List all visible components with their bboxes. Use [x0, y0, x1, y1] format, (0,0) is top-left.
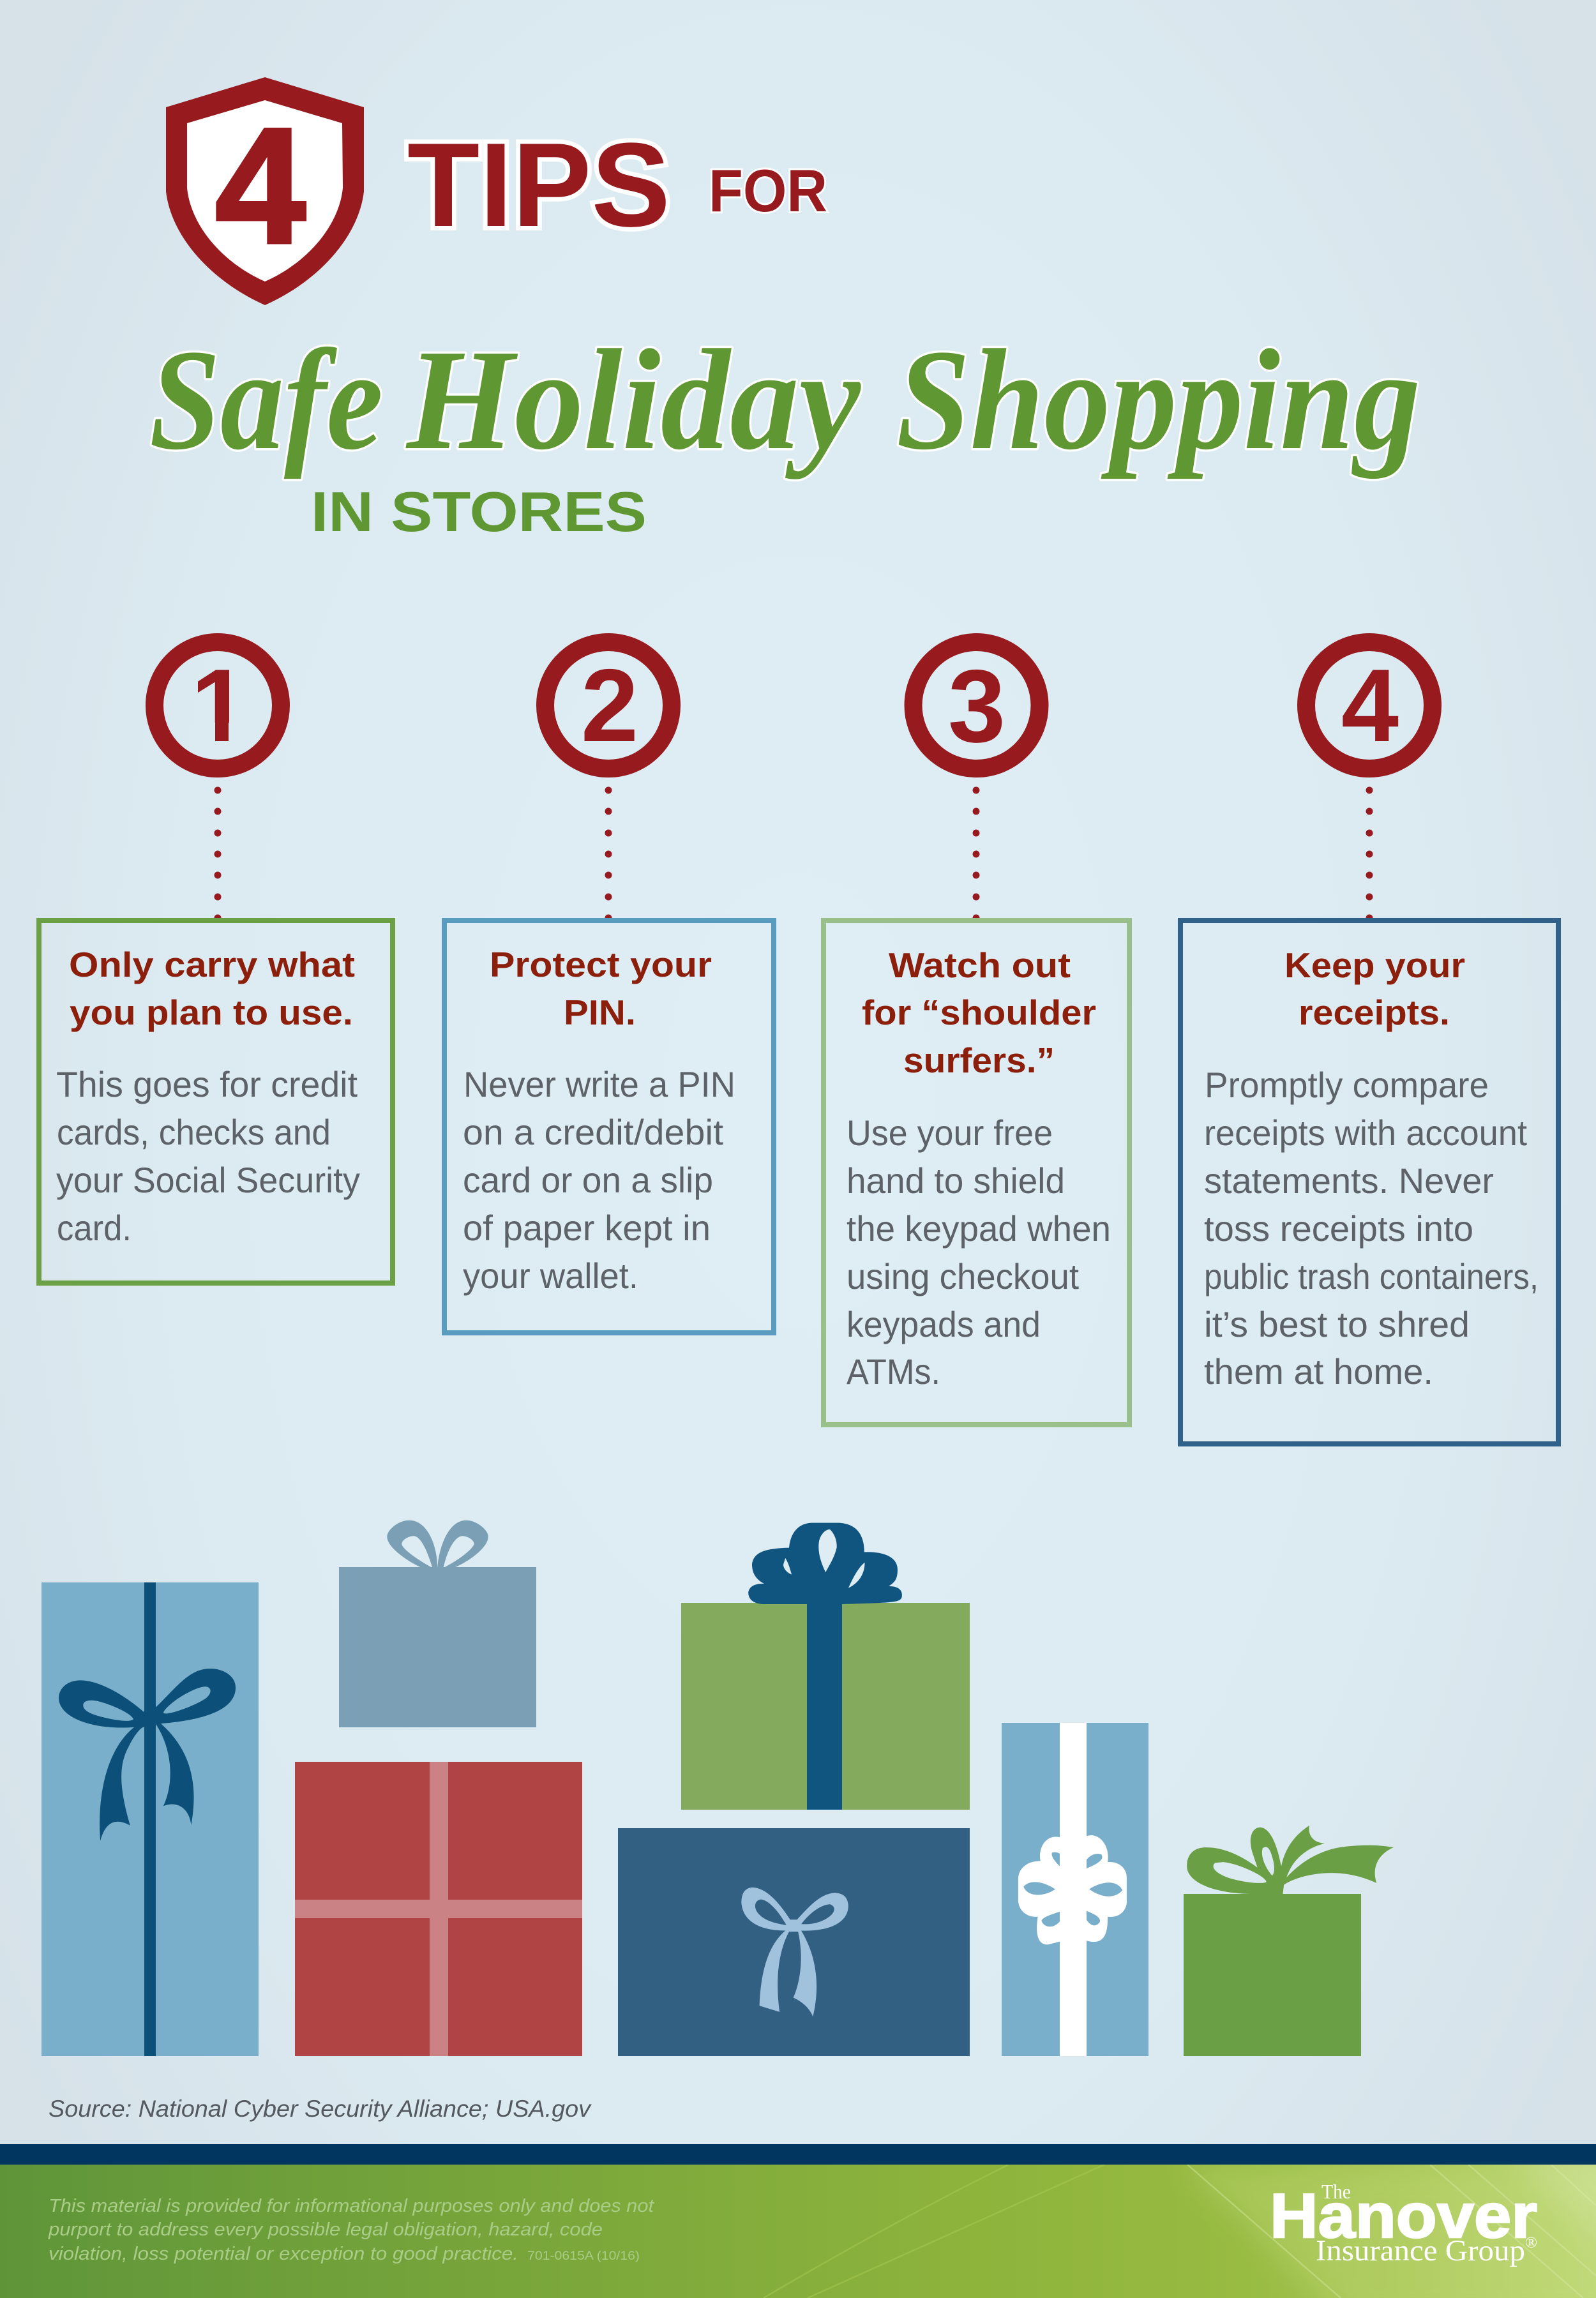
tip 1	[39, 642, 393, 1283]
tip 3 body: the keypad when	[847, 1208, 1111, 1249]
title: Safe Holiday Shopping: Holiday	[405, 320, 861, 479]
tip 4 body	[1204, 1065, 1539, 1392]
gift: green box with swept bow	[1184, 1826, 1394, 2056]
icon: green swept bow	[1187, 1826, 1394, 1894]
number badge 2	[545, 642, 672, 769]
tip 3 body: Use your free	[847, 1113, 1053, 1153]
gift: tall light blue box with navy bow	[41, 1582, 259, 2056]
logo: The Hanover Insurance Group: The	[1321, 2180, 1351, 2203]
dotted connector 1	[215, 786, 221, 922]
disclaimer: violation, loss potential or exception to good practice.	[49, 2244, 518, 2264]
tip 2 heading: PIN.	[564, 993, 636, 1032]
tip 1 heading	[69, 945, 355, 1032]
gift: navy box with pale bow	[618, 1828, 970, 2056]
tip 1 body	[56, 1064, 360, 1248]
tip 4 body: public trash containers,	[1204, 1256, 1539, 1296]
icon: grey-blue bow	[387, 1521, 488, 1568]
number badge 4: 4	[1341, 648, 1399, 763]
title: 4 tips for	[166, 77, 827, 305]
tip 2 body: your wallet.	[463, 1256, 638, 1296]
number badge 2: 2	[581, 648, 638, 763]
icon: navy layered bow	[748, 1523, 902, 1604]
heading: TIPS: TIPS	[407, 118, 670, 252]
tip 2 body: Never write a PIN	[463, 1064, 735, 1104]
gift: red box with cross ribbon	[295, 1762, 582, 2056]
footer band	[0, 2144, 1596, 2298]
tip 4 body: statements. Never	[1204, 1160, 1494, 1201]
tip 4 body: them at home.	[1204, 1351, 1433, 1392]
disclaimer	[48, 2196, 655, 2264]
tip 4 body: Promptly compare	[1205, 1065, 1489, 1105]
panel: tip 4 box	[1180, 920, 1558, 1444]
tip 3 body	[847, 1113, 1111, 1392]
tip 4 body: toss receipts into	[1204, 1208, 1473, 1249]
number badge 1	[154, 642, 281, 769]
number badge 3: 3	[948, 649, 1005, 764]
subtitle: in stores: IN STORES	[311, 480, 647, 543]
number badge 1: 1	[191, 648, 248, 763]
source note: Source: National Cyber Security Alliance; USA.gov	[49, 2096, 592, 2122]
tip 2 heading: Protect your	[490, 945, 712, 984]
icon: navy bow	[59, 1669, 236, 1841]
tip 1 body: cards, checks and	[57, 1112, 331, 1152]
tip 4	[1180, 642, 1558, 1444]
panel: tip 1 box	[39, 920, 393, 1283]
tip 3 body: ATMs.	[847, 1351, 940, 1392]
title: Safe Holiday Shopping: Safe	[149, 320, 383, 479]
title: Safe Holiday Shopping: Shopping	[896, 320, 1420, 479]
number badge 3	[913, 642, 1039, 769]
logo: The Hanover Insurance Group: Insurance Group	[1316, 2234, 1517, 2267]
logo: The Hanover Insurance Group: ®	[1525, 2235, 1537, 2251]
icon: shield with number 4	[166, 77, 364, 305]
tip 3 heading: Watch out	[889, 945, 1071, 985]
tip 4 heading: receipts.	[1299, 993, 1450, 1032]
tip 3 body: hand to shield	[847, 1160, 1065, 1201]
heading: FOR: FOR	[709, 157, 827, 224]
tip 1 body: your Social Security	[56, 1160, 360, 1200]
tip 3 heading: for “shoulder	[862, 993, 1096, 1032]
tip 1 body: This goes for credit	[56, 1064, 358, 1104]
tip 1 heading: Only carry what	[69, 945, 355, 984]
logo: The Hanover Insurance Group: Hanover	[1270, 2181, 1537, 2251]
disclaimer: purport to address every possible legal obligation, hazard, code	[48, 2219, 603, 2240]
title: Safe Holiday Shopping	[149, 320, 1420, 479]
tip 2 body: on a credit/debit	[463, 1112, 723, 1152]
panel: tip 2 box	[444, 920, 774, 1333]
tip 2 body: of paper kept in	[463, 1208, 711, 1248]
tip 3 body: using checkout	[847, 1256, 1079, 1296]
tip 3 heading	[862, 945, 1096, 1080]
disclaimer: This material is provided for informational purposes only and does not	[49, 2196, 655, 2216]
dotted connector 2	[605, 786, 612, 922]
tip 3 heading: surfers.”	[903, 1040, 1055, 1080]
tip 4 heading	[1284, 945, 1465, 1032]
panel: tip 3 box	[824, 920, 1129, 1425]
gift: green box with navy ribbon and bow	[681, 1523, 970, 1810]
tip 2 body	[463, 1064, 735, 1296]
disclaimer: 701-0615A (10/16)	[527, 2249, 640, 2263]
tip 2 body: card or on a slip	[463, 1160, 713, 1200]
tip 4 body: it’s best to shred	[1204, 1304, 1470, 1344]
dotted connector 4	[1366, 786, 1373, 922]
tip 2	[444, 642, 774, 1333]
icon: pale blue bow	[741, 1888, 848, 2016]
icon: shield with number 4: 4	[215, 93, 307, 278]
tip 2 heading	[490, 945, 712, 1032]
tip 3 body: keypads and	[847, 1304, 1041, 1344]
gift: grey-blue box with loop bow	[339, 1521, 536, 1727]
gift: narrow blue box with white ribbon and flower bow	[1002, 1723, 1148, 2056]
tip 3	[824, 642, 1129, 1425]
number badge 4	[1306, 642, 1433, 769]
icon: white flower bow	[1018, 1835, 1127, 1944]
tip 1 heading: you plan to use.	[70, 993, 353, 1032]
dotted connector 3	[973, 786, 979, 922]
tip 4 heading: Keep your	[1284, 945, 1465, 985]
tip 4 body: receipts with account	[1204, 1113, 1527, 1153]
tip 1 body: card.	[57, 1208, 132, 1248]
